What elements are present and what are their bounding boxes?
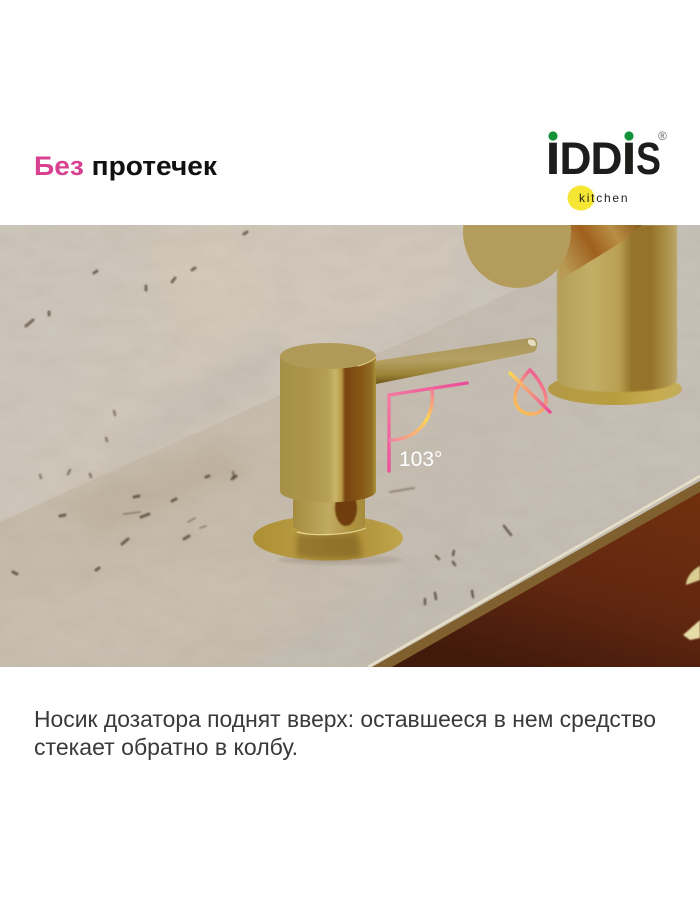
counter light patches xyxy=(78,447,244,530)
dispenser top xyxy=(280,343,376,369)
cabinet front xyxy=(382,490,700,667)
neck dark reflection xyxy=(334,500,358,527)
faucet cylinder xyxy=(557,225,677,392)
logo yellow spot xyxy=(568,186,594,210)
dispenser lever xyxy=(375,338,537,384)
counter bevel xyxy=(378,648,404,664)
icon: 103 degree angle xyxy=(389,383,467,471)
lever tip xyxy=(528,339,536,346)
logo wordmark: I xyxy=(546,133,560,184)
angle value 103°: 103° xyxy=(399,448,442,471)
description text: Носик дозатора поднят вверх: оставшееся в нем средство xyxy=(34,706,656,732)
logo green dot left xyxy=(548,131,558,141)
stone specks xyxy=(13,232,511,604)
dispenser shadow xyxy=(278,555,402,565)
stone wall xyxy=(0,225,700,667)
logo wordmark: I xyxy=(622,133,636,184)
faucet handle arm xyxy=(560,225,642,280)
angle horizontal line xyxy=(389,383,467,395)
logo green dot right xyxy=(624,131,634,141)
counter top surface xyxy=(0,293,510,667)
drop outline xyxy=(515,370,546,414)
wall lighting patches xyxy=(100,225,460,480)
stone grain xyxy=(0,225,700,667)
faucet base xyxy=(548,380,682,405)
dispenser base disc xyxy=(253,516,403,560)
icon: crossed-out drop xyxy=(510,370,550,414)
angle arc xyxy=(390,390,432,440)
logo wordmark: D xyxy=(560,133,592,184)
heading: Без протечек: Без протечек xyxy=(34,151,217,181)
dispenser body xyxy=(280,357,376,502)
angle vertical line xyxy=(387,395,391,471)
soap dispenser xyxy=(253,338,537,565)
counter gold trim xyxy=(372,481,700,667)
product photo xyxy=(0,176,700,667)
logo wordmark xyxy=(546,133,661,184)
faucet on the right xyxy=(463,225,682,405)
logo wordmark: D xyxy=(590,133,622,184)
icon: cabinet handle reflection xyxy=(683,566,700,640)
faucet handle disc xyxy=(463,225,571,288)
logo kitchen word: kitchen xyxy=(579,191,629,205)
top rim highlight xyxy=(358,357,376,366)
drop slash xyxy=(510,373,550,412)
logo: IDDIS kitchen xyxy=(546,129,667,210)
dispenser neck xyxy=(293,495,365,534)
registered mark: ® xyxy=(658,129,667,143)
neck shine ring xyxy=(297,528,366,535)
base reflection xyxy=(296,534,362,559)
logo wordmark: S xyxy=(636,133,661,184)
description text: стекает обратно в колбу. xyxy=(34,734,298,760)
counter light edge xyxy=(368,476,700,667)
infographic page xyxy=(0,131,700,760)
